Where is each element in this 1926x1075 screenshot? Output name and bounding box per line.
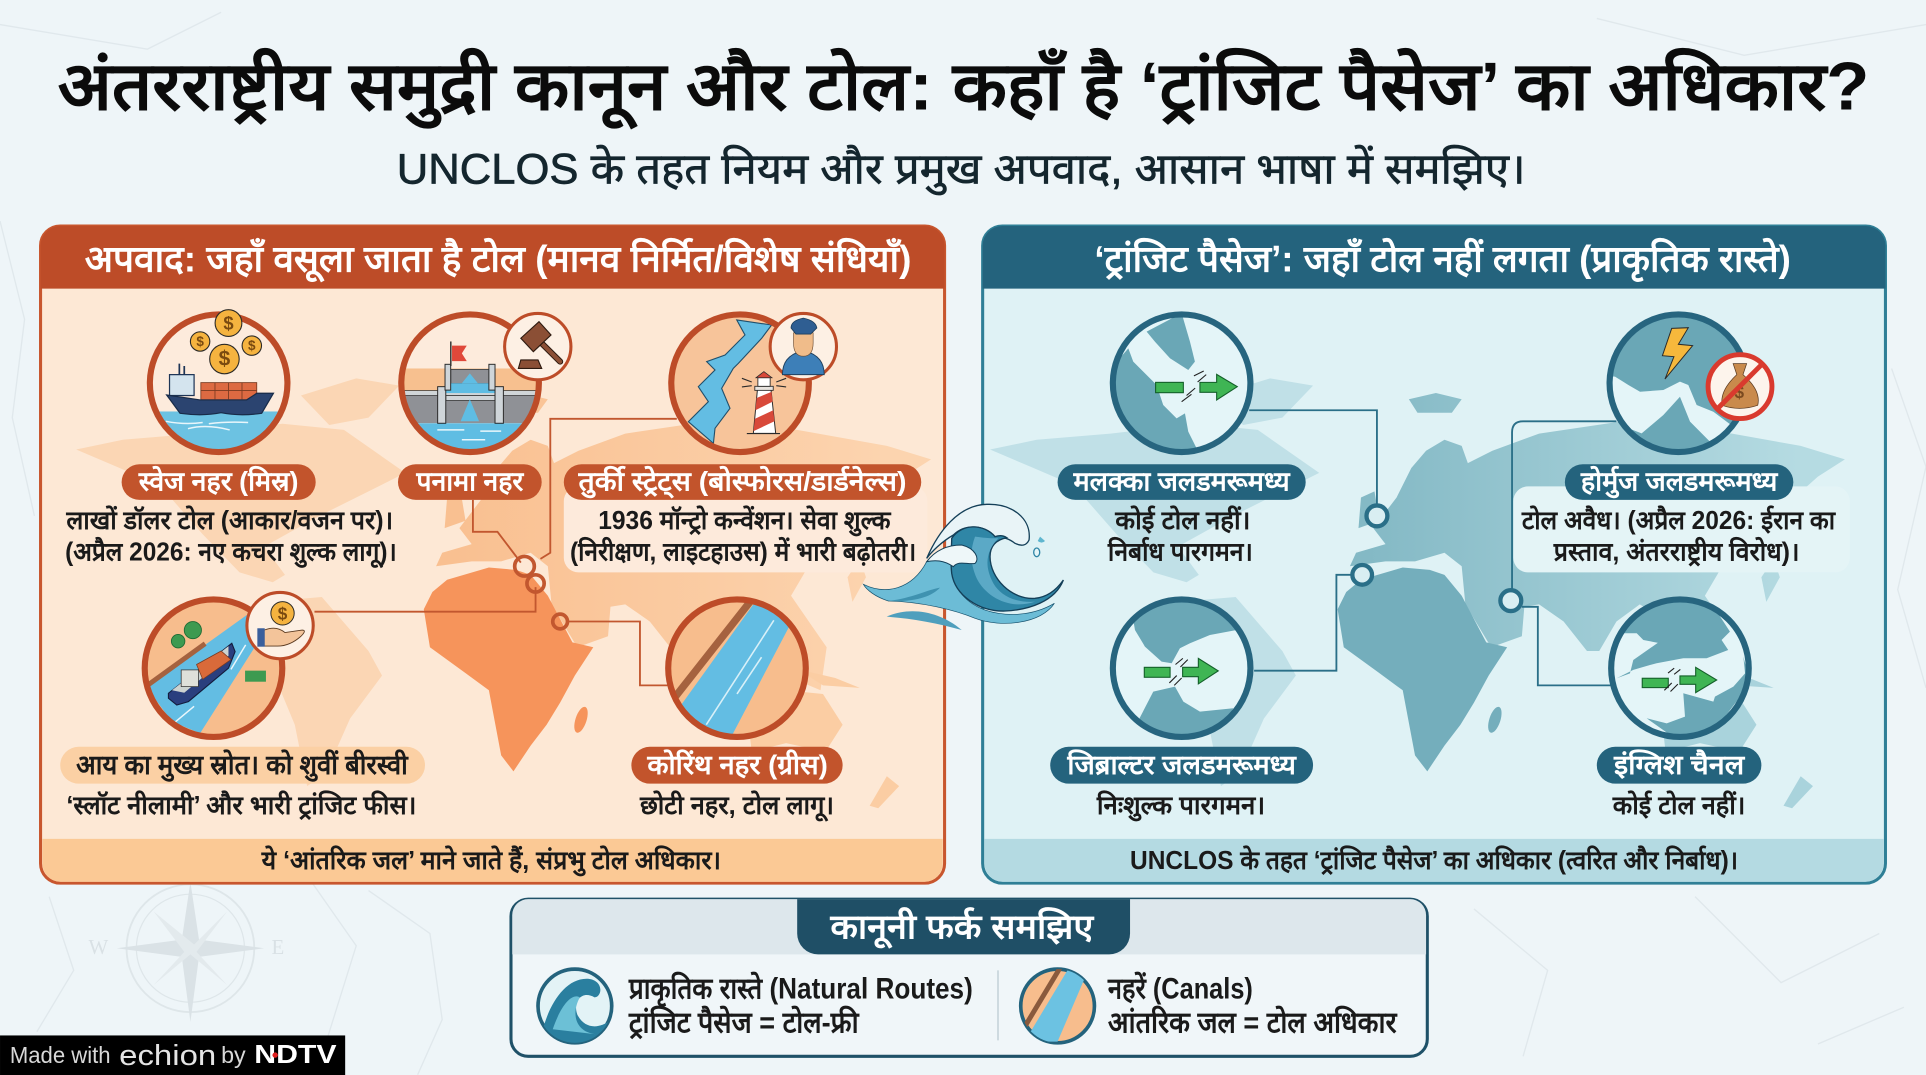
icon: Gibraltar strait — [1113, 596, 1250, 742]
compass rose: W — [88, 935, 108, 959]
text backdrop: Hormuz — [1513, 486, 1850, 572]
legend text: canals — [1107, 971, 1397, 1040]
watermark: echion — [119, 1039, 216, 1071]
text: Malacca details: निर्बाध पारगमन। — [1107, 537, 1253, 567]
legend heading tab — [797, 899, 1130, 954]
icon: Suez ship and coins: $ — [223, 313, 234, 334]
panel: exceptions with tolls — [41, 226, 945, 883]
icon: Hormuz strait — [1597, 314, 1772, 452]
subtitle: UNCLOS के तहत नियम और प्रमुख अपवाद, आसान भाषा में समझिए। — [397, 145, 1526, 196]
footer text: exceptions: ये ‘आंतरिक जल’ माने जाते हैं, संप्रभु टोल अधिकार। — [261, 845, 721, 877]
legend text: canals: आंतरिक जल = टोल अधिकार — [1108, 1006, 1397, 1040]
label: English Channel — [1597, 747, 1761, 784]
watermark: by — [221, 1042, 246, 1068]
panel heading text: exceptions: अपवाद: जहाँ वसूला जाता है टोल (मानव निर्मित/विशेष संधियाँ) — [85, 238, 911, 283]
icon: central wave — [863, 504, 1063, 630]
legend top band — [512, 899, 1426, 954]
text: Gibraltar details: निःशुल्क पारगमन। — [1096, 790, 1265, 822]
legend text: natural routes: ट्रांजिट पैसेज = टोल-फ्री — [628, 1006, 860, 1040]
label: Suez Canal — [122, 464, 316, 500]
text: Malacca details — [1107, 505, 1253, 567]
footer text: transit passage: UNCLOS के तहत ‘ट्रांजिट पैसेज’ का अधिकार (त्वरित और निर्बाध)। — [1130, 845, 1738, 875]
text: Malacca details: कोई टोल नहीं। — [1114, 505, 1250, 535]
panel heading text: transit passage: ‘ट्रांजिट पैसेज’: जहाँ टोल नहीं लगता (प्राकृतिक रास्ते) — [1094, 238, 1791, 283]
icon: Suez ship and coins — [145, 310, 292, 461]
label: Suez Canal: स्वेज नहर (मिस्र) — [138, 465, 298, 496]
label: Gibraltar — [1050, 747, 1313, 784]
text: Suez Canal details: (अप्रैल 2026: नए कचरा शुल्क लागू)। — [65, 537, 397, 569]
icon: Corinth canal — [665, 596, 809, 740]
label: revenue source: आय का मुख्य स्रोत। को शुवीं बीरस्वी — [76, 749, 409, 782]
compass rose: E — [271, 935, 284, 959]
world map: left — [76, 378, 931, 808]
panel header: exceptions — [41, 226, 945, 289]
compass rose — [88, 882, 284, 1022]
label: Panama Canal — [398, 464, 542, 500]
divider — [997, 970, 999, 1040]
footer band: exceptions — [42, 839, 943, 882]
text: revenue details: ‘स्लॉट नीलामी’ और भारी ट्रांजिट फीस। — [66, 790, 416, 820]
watermark: NDTV — [254, 1041, 338, 1069]
legend text: natural routes — [628, 971, 973, 1040]
legend text: canals: नहरें (Canals) — [1107, 971, 1253, 1005]
label: Corinth Canal — [631, 747, 843, 784]
icon: Turkish Straits lighthouse and officer — [671, 313, 836, 452]
label: Turkish Straits: तुर्की स्ट्रेट्स (बोस्फोरस/डार्डनेल्स) — [577, 465, 906, 499]
footer band: transit passage — [984, 839, 1884, 882]
text: Turkish Straits details: (निरीक्षण, लाइटहाउस) में भारी बढ़ोतरी। — [570, 537, 916, 567]
text: Hormuz details — [1521, 505, 1836, 567]
icon: Suez ship and coins: $ — [248, 338, 256, 353]
text: Turkish Straits details: 1936 मॉन्ट्रो कन्वेंशन। सेवा शुल्क — [598, 505, 892, 537]
label: English Channel: इंग्लिश चैनल — [1613, 749, 1746, 780]
icon: English Channel — [1611, 594, 1750, 742]
icon: wave legend — [538, 969, 612, 1044]
text: Hormuz details: प्रस्ताव, अंतरराष्ट्रीय विरोध)। — [1553, 537, 1799, 567]
panel header: transit passage — [983, 226, 1885, 289]
connector lines: left — [314, 419, 677, 685]
watermark: Made with — [10, 1042, 111, 1068]
label: Gibraltar: जिब्राल्टर जलडमरूमध्य — [1066, 749, 1297, 780]
text: English Channel details: कोई टोल नहीं। — [1612, 790, 1745, 820]
icon: Suez revenue canal and hand — [145, 592, 313, 737]
title: अंतरराष्ट्रीय समुद्री कानून और टोल: कहाँ है ‘ट्रांजिट पैसेज’ का अधिकार? — [58, 48, 1869, 130]
text backdrop: Turkish Straits — [564, 486, 927, 572]
text: Suez Canal details: लाखों डॉलर टोल (आकार/वजन पर)। — [65, 505, 393, 535]
world map: right — [990, 378, 1845, 808]
text: Hormuz details: टोल अवैध। (अप्रैल 2026: ईरान का — [1521, 505, 1836, 535]
label: Panama Canal: पनामा नहर — [415, 466, 524, 496]
watermark — [0, 1035, 345, 1075]
panel: transit passage — [983, 226, 1885, 883]
label: Corinth Canal: कोरिंथ नहर (ग्रीस) — [646, 749, 828, 780]
legend heading text: कानूनी फर्क समझिए — [829, 906, 1095, 949]
icon: Malacca strait — [1105, 313, 1250, 457]
icon: canal legend — [1021, 968, 1094, 1043]
panel: legal difference — [511, 899, 1427, 1056]
legend text: natural routes: प्राकृतिक रास्ते (Natural Routes) — [628, 971, 973, 1007]
text: Turkish Straits details — [570, 505, 916, 567]
text: Suez Canal details — [65, 505, 397, 569]
icon: Panama locks and gavel — [399, 313, 571, 460]
text: Corinth Canal details: छोटी नहर, टोल लागू। — [639, 790, 834, 822]
label: Hormuz: होर्मुज जलडमरूमध्य — [1580, 465, 1779, 498]
connector lines: right — [1249, 410, 1616, 685]
label: Malacca: मलक्का जलडमरूमध्य — [1073, 466, 1291, 496]
icon: Suez ship and coins: $ — [219, 348, 231, 371]
icon: Hormuz strait: $ — [1734, 382, 1744, 402]
icon: Suez revenue canal and hand: $ — [278, 603, 288, 623]
icon: Suez ship and coins: $ — [196, 334, 204, 349]
